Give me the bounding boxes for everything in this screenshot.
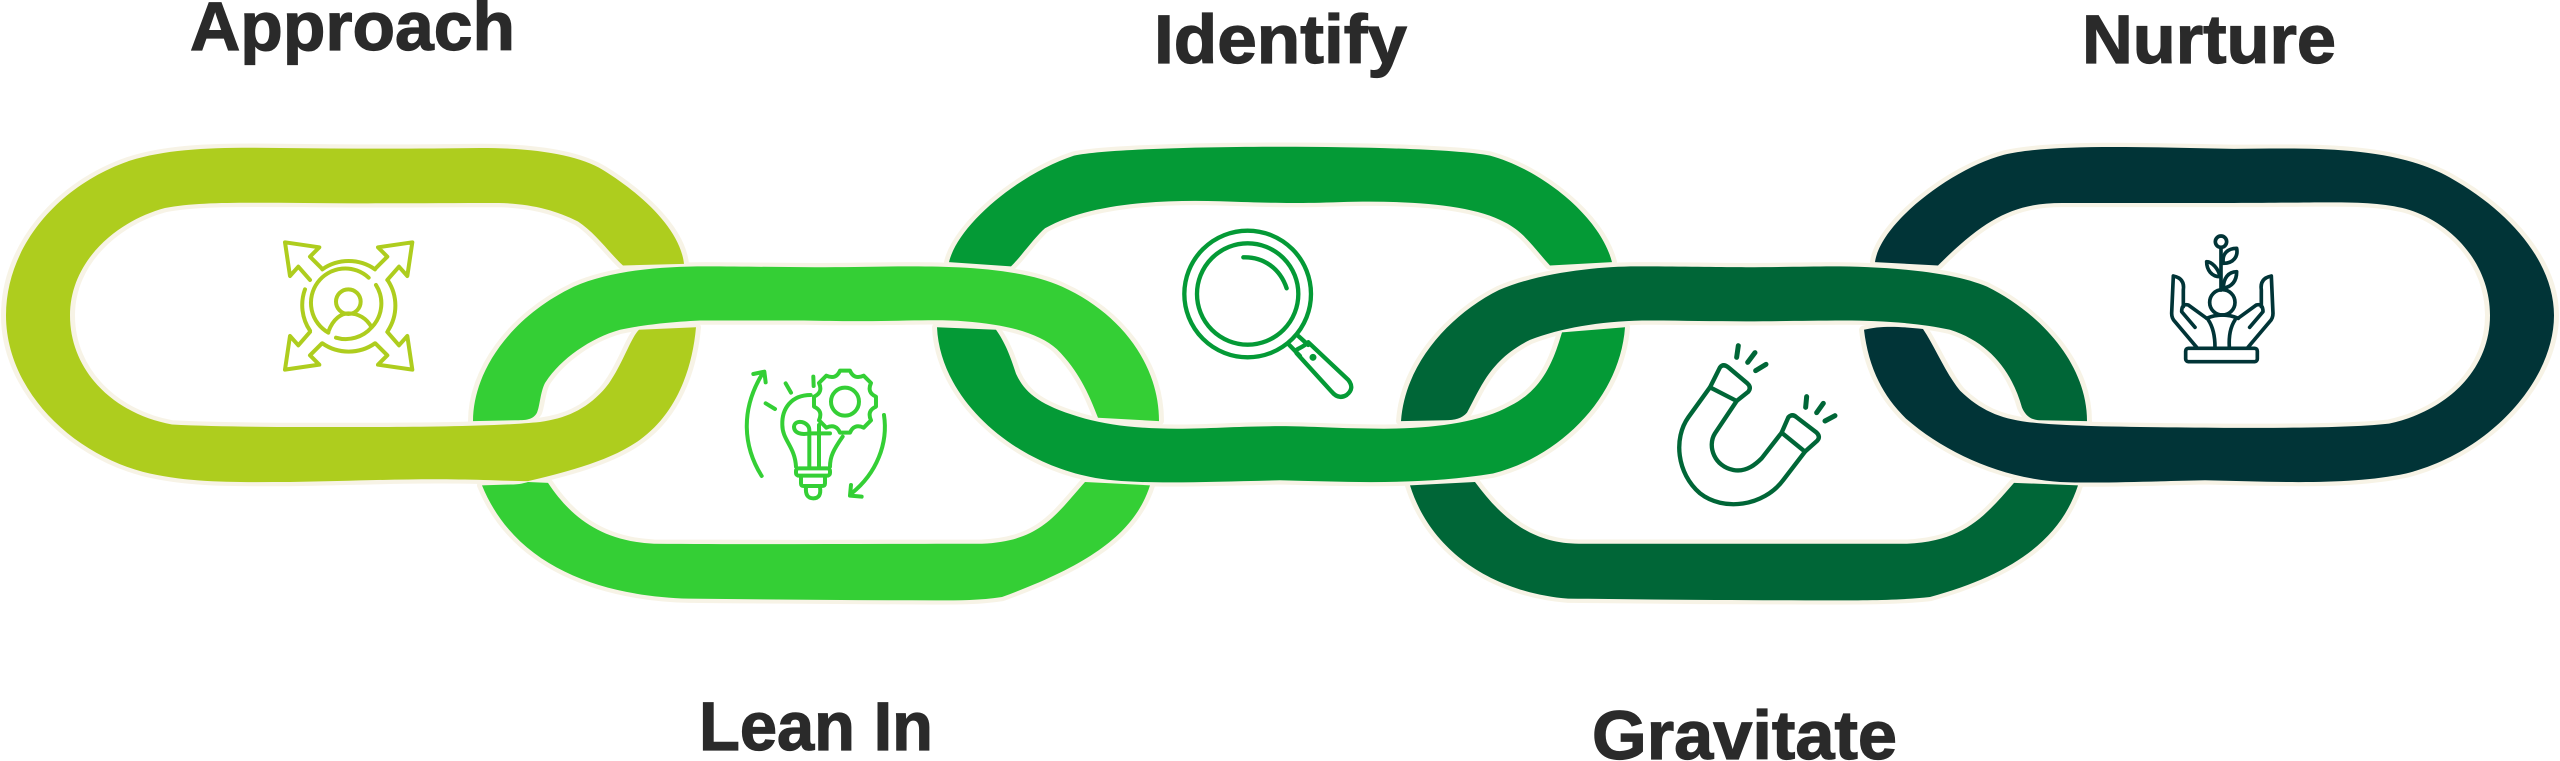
icon: magnifying glass [1184, 231, 1351, 397]
chain link: Nurture [1864, 147, 2554, 483]
chain link: Gravitate [1401, 266, 2087, 600]
icon: hands holding person and plant [2172, 236, 2273, 362]
chain link: Approach [6, 148, 696, 482]
icon: person with outward arrows [285, 242, 412, 370]
heading: Identify: Identify [1154, 1, 1407, 78]
chain link: Identify [937, 147, 1625, 482]
icon: horseshoe magnet [1679, 346, 1835, 504]
chain link: Lean In [473, 266, 1159, 600]
icon: light bulb with gear [747, 371, 885, 498]
heading: Nurture: Nurture [2082, 1, 2336, 78]
